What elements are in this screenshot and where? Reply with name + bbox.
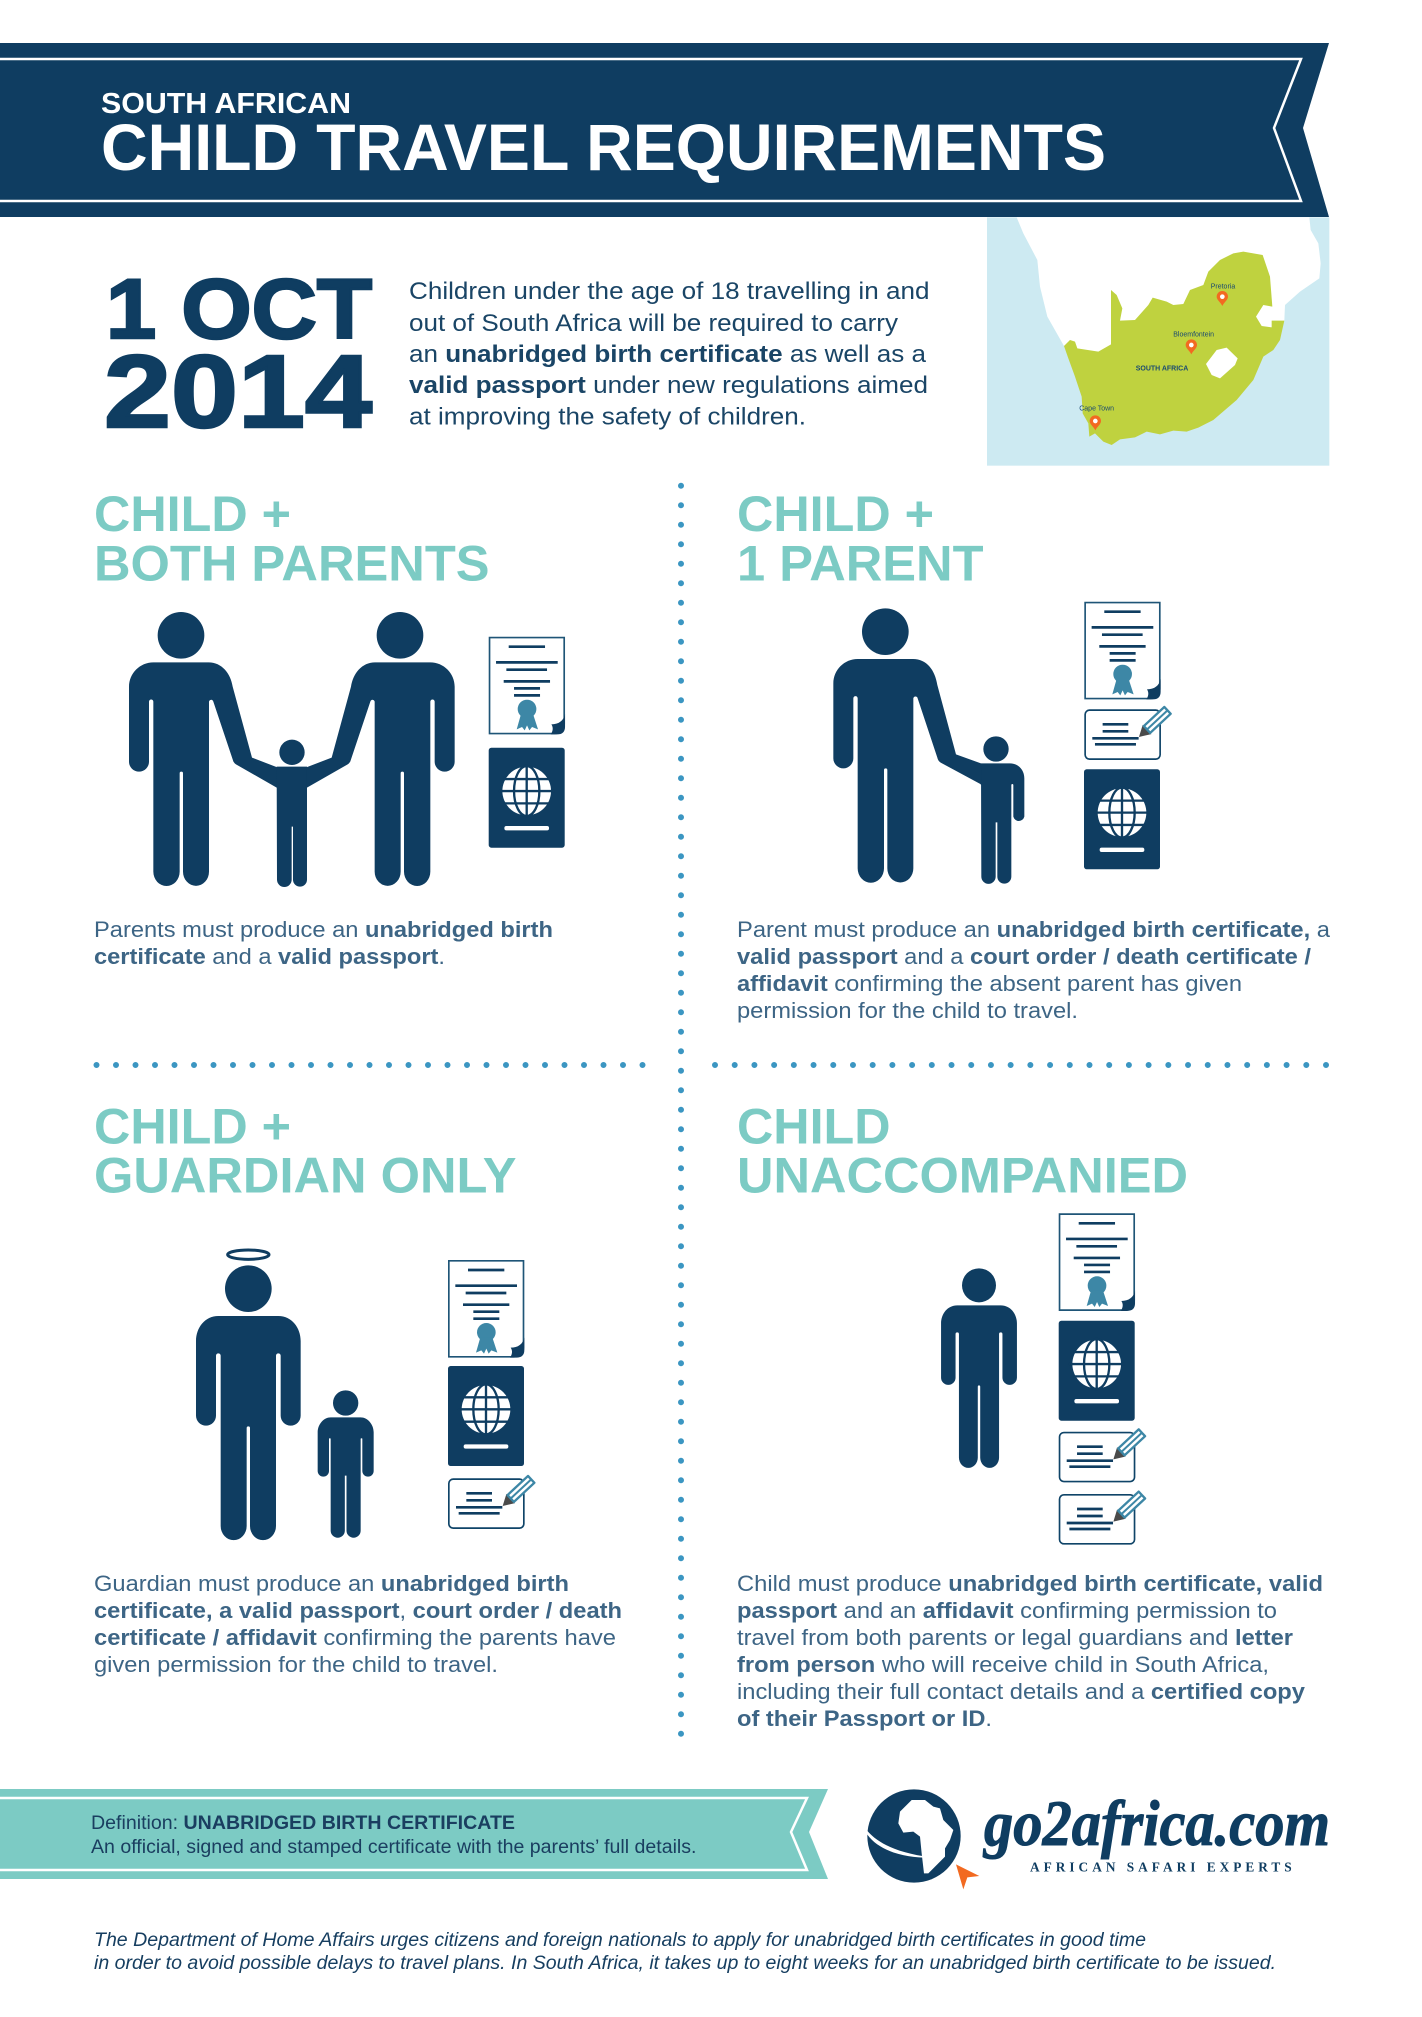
- description: Guardian must produce an unabridged birth: [94, 1571, 569, 1596]
- description: from person who will receive child in South Africa,: [737, 1652, 1269, 1677]
- icon: birth certificate: [1085, 603, 1161, 699]
- panel: child + 1 parent: [737, 486, 1331, 1023]
- description: [94, 917, 553, 969]
- heading: CHILD +: [737, 486, 934, 542]
- description: certificate and a valid passport .: [94, 944, 445, 969]
- heading: BOTH PARENTS: [94, 536, 490, 592]
- map of South Africa: Cape Town: [1079, 406, 1114, 413]
- icon: signed affidavit: [1085, 706, 1172, 759]
- description: including their full contact details and a certified copy: [737, 1679, 1306, 1704]
- heading: CHILD: [737, 1098, 890, 1154]
- title banner: [0, 43, 1329, 217]
- intro paragraph: [409, 278, 930, 430]
- icon: globe with Africa: [867, 1789, 979, 1889]
- icon: signed affidavit: [449, 1475, 536, 1528]
- icon: signed letter: [1060, 1490, 1146, 1544]
- icon: passport: [1059, 1321, 1135, 1421]
- heading: CHILD +: [94, 1098, 291, 1154]
- map of South Africa: Pretoria: [1211, 283, 1235, 290]
- icon: guardian with halo and child: [196, 1250, 374, 1540]
- icon: signed affidavit: [1060, 1428, 1146, 1482]
- heading: [737, 1098, 1188, 1204]
- definition text: An official, signed and stamped certificate with the parents’ full details.: [91, 1837, 696, 1858]
- intro paragraph: at improving the safety of children.: [409, 404, 806, 430]
- tagline: AFRICAN SAFARI EXPERTS: [1030, 1860, 1292, 1875]
- intro paragraph: an unabridged birth certificate as well as a: [409, 341, 926, 368]
- icon: passport: [448, 1366, 524, 1466]
- description: Parent must produce an unabridged birth certificate, a: [737, 917, 1331, 942]
- date: 1 Oct 2014: 2014: [104, 334, 372, 449]
- description: passport and an affidavit confirming permission to: [737, 1598, 1277, 1623]
- heading: [94, 486, 490, 592]
- icon: birth certificate: [449, 1261, 524, 1358]
- heading: 1 PARENT: [737, 536, 984, 592]
- description: certificate, a valid passport , court order / death: [94, 1598, 622, 1623]
- heading: [94, 1098, 516, 1204]
- icon: passport: [1084, 769, 1160, 869]
- wordmark: go2africa.com: [982, 1788, 1330, 1860]
- map of South Africa: SOUTH AFRICA: [1136, 366, 1188, 373]
- icon: passport: [489, 748, 565, 848]
- date: 1 Oct 2014: 1 OCT: [106, 262, 372, 356]
- description: of their Passport or ID .: [737, 1706, 992, 1731]
- footer note: [94, 1930, 1276, 1974]
- icon: parent holding child's hand: [833, 608, 1024, 884]
- heading: GUARDIAN ONLY: [94, 1148, 516, 1204]
- definition banner: [0, 1789, 828, 1879]
- description: [737, 1571, 1323, 1731]
- heading: [737, 486, 984, 592]
- date: 1 Oct 2014: [104, 262, 372, 449]
- description: affidavit confirming the absent parent has given: [737, 971, 1242, 996]
- description: travel from both parents or legal guardians and letter: [737, 1625, 1293, 1650]
- description: given permission for the child to travel.: [94, 1652, 498, 1677]
- heading: UNACCOMPANIED: [737, 1148, 1188, 1204]
- definition title: Definition: UNABRIDGED BIRTH CERTIFICATE: [91, 1813, 515, 1834]
- panel: child + guardian only: [94, 1098, 622, 1677]
- intro paragraph: valid passport under new regulations aimed: [409, 372, 928, 399]
- icon: birth certificate: [1060, 1214, 1135, 1311]
- footer note: in order to avoid possible delays to travel plans. In South Africa, it takes up to eight weeks for an unabridged birth certificate to be issued.: [94, 1953, 1276, 1974]
- heading: CHILD +: [94, 486, 291, 542]
- footer note: The Department of Home Affairs urges citizens and foreign nationals to apply for unabridged birth certificates in good time: [94, 1930, 1146, 1951]
- dotted dividers: [96, 486, 1327, 1734]
- intro paragraph: Children under the age of 18 travelling in and: [409, 278, 930, 305]
- main title: CHILD TRAVEL REQUIREMENTS: [101, 110, 1106, 184]
- description: valid passport and a court order / death certificate /: [737, 944, 1311, 969]
- description: certificate / affidavit confirming the parents have: [94, 1625, 616, 1650]
- icon: lone child figure: [941, 1268, 1017, 1468]
- description: Child must produce unabridged birth certificate, valid: [737, 1571, 1323, 1596]
- description: [737, 917, 1331, 1023]
- icon: two parents holding child's hands: [129, 612, 455, 887]
- description: permission for the child to travel.: [737, 998, 1078, 1023]
- map of South Africa: Bloemfontein: [1173, 331, 1214, 338]
- icon: birth certificate: [490, 638, 565, 734]
- intro paragraph: out of South Africa will be required to carry: [409, 310, 899, 337]
- title kicker: SOUTH AFRICAN: [101, 88, 351, 120]
- description: Parents must produce an unabridged birth: [94, 917, 553, 942]
- panel: child unaccompanied: [737, 1098, 1323, 1731]
- panel: child + both parents: [94, 486, 565, 969]
- logo: go2africa.com: [867, 1788, 1330, 1889]
- map of South Africa: [987, 217, 1329, 466]
- description: [94, 1571, 622, 1677]
